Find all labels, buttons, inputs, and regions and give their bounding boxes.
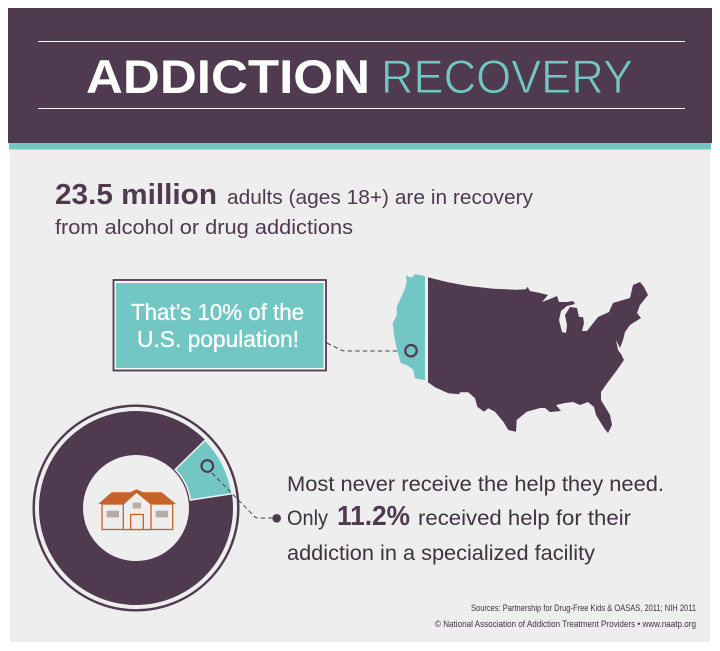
text block: most never receive help: Most never receive the help they need. [287, 473, 664, 496]
icon: house [98, 489, 176, 530]
text block: 23.5 million adults [55, 179, 534, 239]
title: RECOVERY [381, 51, 633, 104]
title [86, 51, 633, 104]
callout: 10% of the U.S. population: That’s 10% of the [131, 299, 304, 325]
callout: 10% of the U.S. population: U.S. population! [137, 326, 299, 352]
arrow: donut to text [212, 473, 273, 518]
chart: teal wedge [175, 440, 232, 500]
text block: most never receive help: 11.2% [337, 500, 410, 531]
text block: most never receive help [287, 473, 664, 565]
map: western states highlight [393, 274, 425, 380]
chart: donut 11.2% [34, 406, 238, 610]
title: ADDICTION [86, 51, 370, 104]
arrow: callout to map [327, 343, 406, 351]
text block: most never receive help: addiction in a specialized facility [287, 542, 596, 565]
icon: map marker ring [405, 345, 417, 356]
text block: 23.5 million adults: adults (ages 18+) are in recovery [227, 186, 534, 209]
callout: 10% of the U.S. population [114, 280, 326, 370]
text block: sources [435, 603, 696, 630]
text block: 23.5 million adults: from alcohol or drug addictions [55, 216, 353, 239]
text block: most never receive help: Only [287, 507, 328, 530]
map: United States [393, 274, 648, 433]
map: rest of the country [428, 277, 648, 433]
panel: main background [10, 148, 710, 642]
panel: title banner [8, 8, 712, 150]
text block: 23.5 million adults: 23.5 million [55, 179, 217, 211]
icon: leader dot [272, 514, 281, 523]
text block: most never receive help: received help for their [418, 507, 631, 530]
icon: marker ring on wedge [202, 460, 213, 472]
